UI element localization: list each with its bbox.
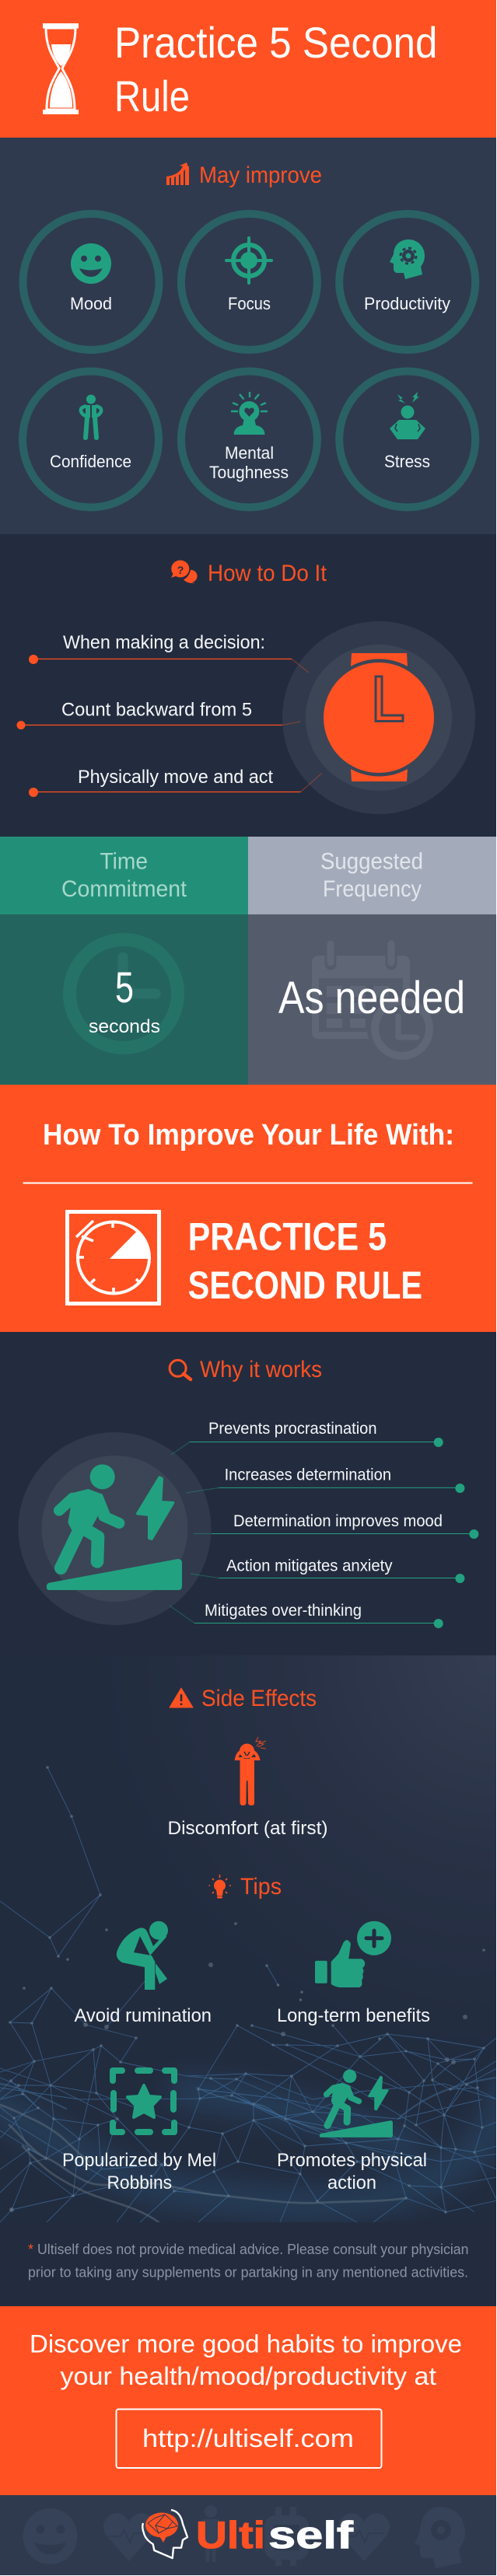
panel: side effects and tips [0,1655,497,2222]
reason: determination improves mood: Determination improves mood [233,1512,443,1530]
reason: prevents procrastination: Prevents procrastination [208,1420,376,1438]
label: long-term benefits: Long-term benefits [277,2005,430,2026]
heading: time commitment: Time [100,848,148,874]
icon: hourglass [43,23,79,114]
heading: practice 5 second rule: PRACTICE 5 [188,1215,387,1259]
value: as needed: As needed [278,973,465,1023]
title: Rule [114,72,190,121]
label: popularized by mel robbins [62,2150,216,2193]
panel: call to action [0,2306,497,2495]
heading: why it works: Why it works [200,1357,322,1382]
logo: ultiself: Ulti [196,2515,265,2557]
reason: increases determination: Increases determination [225,1466,391,1484]
icon: seated person thinking [117,1921,168,1990]
text: discover more: Discover more good habits to improve [30,2330,462,2358]
step: when making a decision [29,632,309,673]
text: medical disclaimer: * [28,2242,33,2257]
heading: time commitment: Commitment [61,876,187,902]
heading: practice 5 second rule: SECOND RULE [188,1264,422,1307]
step: physically move and act [29,767,322,797]
heading: practice 5 second rule [188,1215,422,1307]
heading: side effects: Side Effects [201,1686,317,1711]
reason: increases determination [186,1466,464,1493]
panel: footer [0,2495,497,2576]
heading: suggested frequency [320,848,423,902]
panel: disclaimer [0,2222,497,2306]
label: discomfort: Discomfort (at first) [168,1818,328,1839]
panel: why it works [0,1332,497,1655]
logo: ultiself [142,2510,354,2558]
benefit: mood: Mood [70,294,112,313]
text: discover more: your health/mood/productivity at [61,2362,436,2390]
value: 5 seconds [89,963,160,1037]
icon: watch with halo [282,621,475,814]
benefit: mental toughness: Toughness [209,463,289,482]
heading: may improve: May improve [199,163,322,188]
text: discover more [30,2330,462,2390]
reason: mitigates over-thinking [170,1602,443,1628]
heading: time commitment [61,848,187,902]
watermark icons [23,2505,465,2568]
heading: suggested frequency: Frequency [323,876,422,902]
icon: faded calendar and clock [312,944,437,1064]
heading: how to do it: ? [177,564,184,576]
benefit: productivity [339,214,475,350]
text: medical disclaimer: prior to taking any supplements or partaking in any mentioned activities. [28,2264,468,2280]
label: promotes physical action: Promotes physical [277,2150,427,2171]
panel: may improve [0,138,497,534]
text: medical disclaimer [28,2242,468,2280]
icon: faded clock [70,939,177,1048]
step: count backward: Count backward from 5 [61,700,252,720]
heading: how to do it: How to Do It [208,561,327,586]
icon: person holding head [236,1737,266,1805]
benefit: confidence: Confidence [50,452,131,471]
panel: header [0,0,497,138]
title [114,18,437,121]
background: network constellation [0,1767,497,2222]
title: Practice 5 Second [114,18,437,67]
icon: walking uphill with bolt [19,1432,212,1625]
step: when making a decision: When making a decision: [63,632,265,653]
reason: mitigates over-thinking: Mitigates over-thinking [205,1602,362,1620]
icon: star in dashed frame [113,2071,174,2132]
label: avoid rumination: Avoid rumination [75,2005,212,2026]
label: popularized by mel robbins: Popularized by Mel [62,2150,216,2171]
panel: suggested frequency [248,837,496,1085]
label: promotes physical action: action [327,2172,376,2193]
heading: suggested frequency: Suggested [320,848,423,874]
reason: action mitigates anxiety [191,1557,464,1583]
button: url [117,2409,381,2468]
benefit: focus: Focus [228,294,271,313]
icon: thumbs up with plus [315,1921,391,1987]
panel: how to do it [0,534,497,837]
heading: tips [208,1874,282,1900]
benefit: mood [23,214,159,350]
reason: action mitigates anxiety: Action mitigates anxiety [226,1557,393,1575]
icon: timer in square [67,1211,159,1303]
panel: how to improve banner [0,1085,497,1332]
icon: small walking uphill [320,2070,393,2137]
heading: how to improve your life: How To Improve Your Life With: [43,1119,454,1152]
benefit: mental toughness [181,372,317,507]
benefit: stress: Stress [384,452,430,471]
label: promotes physical action [277,2150,427,2193]
heading: tips: Tips [240,1874,282,1900]
benefit: mental toughness: Mental [225,443,274,463]
benefit: productivity: Productivity [364,294,450,313]
logo: ultiself: self [268,2515,354,2557]
value: 5 seconds: seconds [89,1016,160,1037]
value: 5 seconds: 5 [115,963,134,1012]
step: physically move and act: Physically move and act [78,767,273,788]
text: medical disclaimer: Ultiself does not provide medical advice. Please consult your physician [37,2242,468,2257]
reason: prevents procrastination [171,1420,443,1455]
benefit: confidence [23,372,159,507]
benefit: stress [339,372,475,507]
panel: time commitment [0,837,248,1085]
step: count backward [17,700,300,729]
button: url: http://ultiself.com [142,2424,354,2452]
label: popularized by mel robbins: Robbins [107,2172,172,2193]
reason: determination improves mood [194,1512,478,1539]
benefit: focus [181,214,317,350]
